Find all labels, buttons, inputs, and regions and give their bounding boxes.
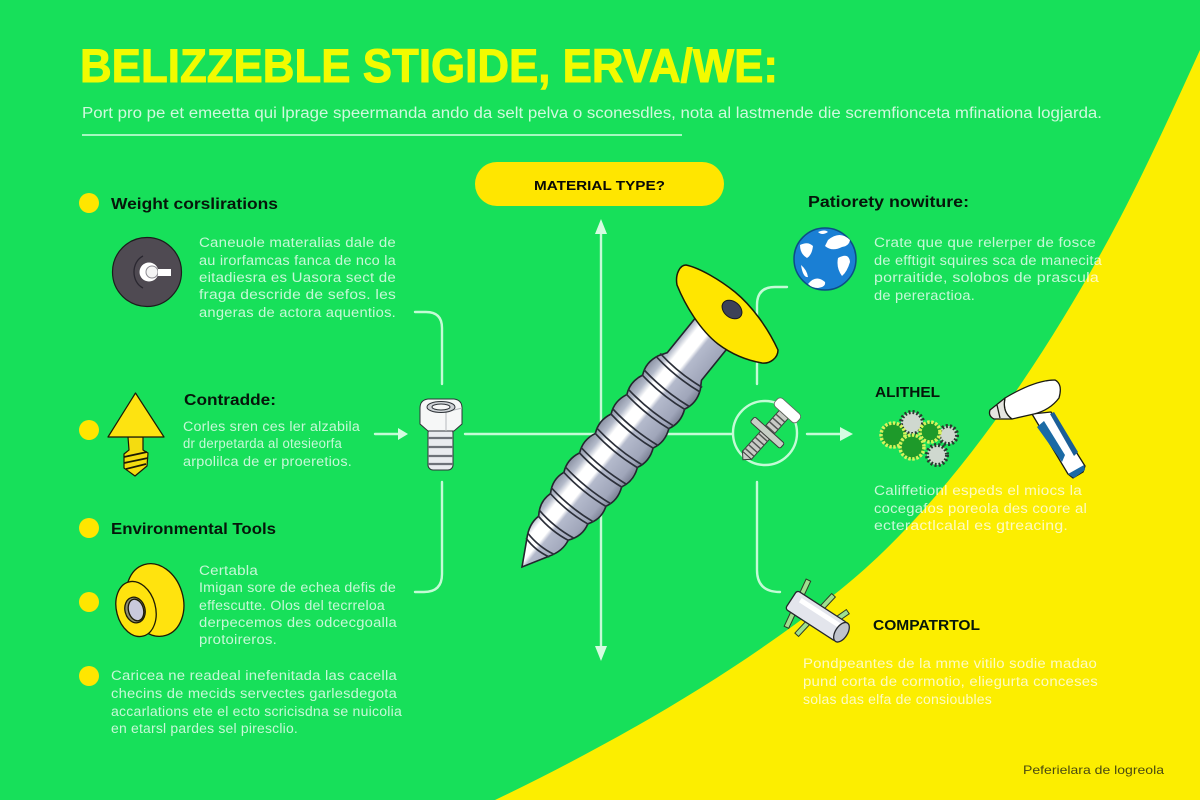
icon: roller with spikes: [776, 577, 861, 658]
pill: material type: [475, 162, 724, 206]
text block: footer note left: checins de mecids servectes garlesdegota: [111, 686, 397, 701]
screw head hole: [718, 296, 746, 323]
icon: globe: [794, 228, 856, 290]
text block: alithel: Califfetionl espeds el miocs la: [874, 483, 1082, 498]
text block: alithel: cocegafos poreola des coore al: [874, 501, 1087, 516]
text block: environmental: Certabla: [199, 563, 258, 578]
text block: environmental: [199, 563, 397, 647]
text block: alithel: [874, 483, 1087, 533]
text block: footer note left: [111, 668, 402, 736]
arrow: fastener to gears: [807, 427, 853, 441]
panel: patiorety nowiture: [794, 194, 1102, 303]
text block: alithel: ecteractlcalal es gtreacing.: [874, 518, 1068, 533]
heading: weight: Weight corslirations: [111, 196, 278, 213]
text block: weight: eitadiesra es Uasora sect de: [199, 270, 396, 285]
text block: contradde: dr derpetarda al otesieorfa: [183, 436, 342, 451]
text block: patiorety: Crate que que relerper de fosce: [874, 235, 1096, 250]
text block: compatrtol: pund corta de cormotio, eliegurta conceses: [803, 674, 1098, 689]
panel: compatrtol: [776, 577, 1098, 707]
icon: yellow arrow screw: [108, 393, 164, 476]
bullet dot: [79, 666, 99, 686]
panel: environmental tools: [79, 518, 402, 736]
text block: weight: au irorfamcas fanca de nco la: [199, 253, 396, 268]
text block: footer note left: Caricea ne readeal inefenitada las cacella: [111, 668, 397, 683]
text block: contradde: arpolilca de er proeretios.: [183, 454, 352, 469]
text block: environmental: Imigan sore de echea defis de: [199, 580, 396, 595]
icon: yellow wheel: [110, 556, 193, 644]
illustration: main screw: [499, 265, 778, 586]
text block: contradde: Corles sren ces ler alzabila: [183, 419, 360, 434]
background: yellow curved sweep: [495, 50, 1200, 800]
bullet dot: [79, 193, 99, 213]
title rule: [82, 134, 682, 136]
text block: compatrtol: [803, 656, 1098, 707]
bullet dot: [79, 518, 99, 538]
text block: contradde: [183, 419, 360, 469]
heading: environmental: Environmental Tools: [111, 521, 276, 538]
icon: small hex bolt: [420, 399, 462, 470]
panel: alithel: [874, 380, 1087, 533]
text block: footer note left: en etarsl pardes sel piresclio.: [111, 721, 298, 736]
heading: alithel: ALITHEL: [875, 384, 940, 401]
diagram axes: [465, 219, 732, 661]
icon: dark disc with bolt: [112, 238, 182, 306]
bullet dot: [79, 592, 99, 612]
title: BELIZZEBLE STIGIDE, ERVA/WE:: [80, 39, 778, 92]
text block: weight: [199, 235, 396, 320]
screw shank and threads: [499, 303, 744, 586]
heading: patiorety: Patiorety nowiture:: [808, 194, 969, 211]
text block: compatrtol: solas das elfa de consioubles: [803, 692, 992, 707]
text block: patiorety: porraitide, solobos de prascula: [874, 270, 1099, 285]
pill: material type: MATERIAL TYPE?: [534, 178, 665, 193]
bullet dot: [79, 420, 99, 440]
screw head: [677, 265, 778, 363]
text block: environmental: effescutte. Olos del tecrreloa: [199, 598, 385, 613]
text block: environmental: derpecemos des odcecgoalla: [199, 615, 397, 630]
icon: gears cluster: [881, 412, 957, 465]
arrow: contradde to bolt: [375, 428, 408, 440]
subtitle: Port pro pe et emeetta qui lprage speermanda ando da selt pelva o sconesdles, nota al lastmende die scremfionceta mfinationa logjarda.: [82, 105, 1102, 122]
icon: circled fastener: [728, 393, 806, 473]
icon: white and blue tool: [990, 380, 1085, 478]
text block: patiorety: de pereractioa.: [874, 288, 975, 303]
heading: compatrtol: COMPATRTOL: [873, 617, 980, 634]
heading: contradde: Contradde:: [184, 392, 276, 409]
text block: weight: angeras de actora aquentios.: [199, 305, 396, 320]
footer note: Peferielara de logreola: [1023, 763, 1164, 777]
panel: contradde: [79, 392, 360, 476]
text block: weight: fraga descride de sefos. les: [199, 287, 396, 302]
text block: patiorety: [874, 235, 1102, 303]
text block: footer note left: accarlations ete el ecto scricisdna se nuicolia: [111, 704, 402, 719]
text block: environmental: protoireros.: [199, 632, 277, 647]
panel: weight considerations: [79, 193, 396, 320]
brackets linking side items: [415, 287, 787, 592]
text block: weight: Caneuole materalias dale de: [199, 235, 396, 250]
text block: patiorety: de efftigit squires sca de manecita: [874, 253, 1102, 268]
text block: compatrtol: Pondpeantes de la mme vitilo sodie madao: [803, 656, 1097, 671]
